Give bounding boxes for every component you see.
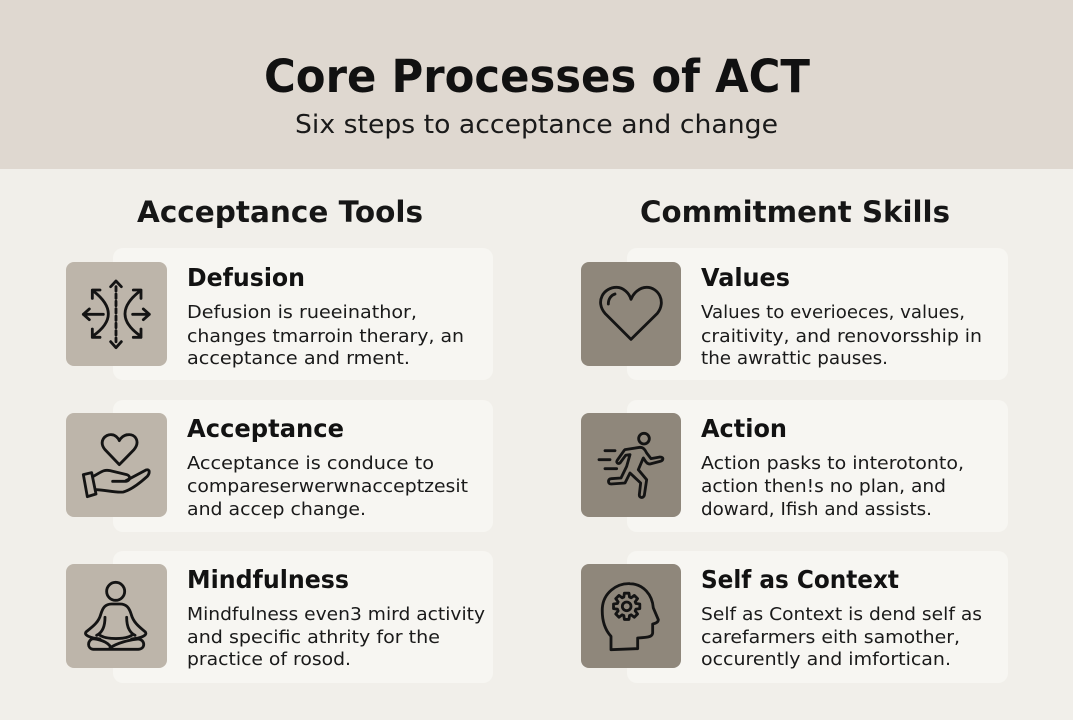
panel: Acceptance [66,400,493,532]
card body: Action pasks to interotonto, [701,453,964,474]
card body: Values to everioeces, values, [701,302,965,323]
card body: carefarmers eith samother, [701,627,960,648]
card body [187,302,464,369]
card body [701,453,964,520]
panel: Action [581,400,1008,532]
card body: and specific athrity for the [187,627,440,648]
icon: head with gear [602,584,658,650]
panel: Mindfulness [66,551,493,683]
icon: heart over open hand [83,435,149,497]
panel: Defusion [66,248,493,380]
card body [701,604,982,670]
heading: Acceptance Tools: Acceptance Tools [137,195,423,229]
card title: Action [701,414,787,443]
card body: and accep change. [187,499,366,520]
card body [701,302,982,369]
card body: Defusion is rueeinathor, [187,302,417,323]
card body: compareserwerwnacceptzesit [187,476,468,497]
card title: Mindfulness [187,565,349,594]
card title: Defusion [187,263,305,292]
card body: practice of rosod. [187,649,351,670]
icon: running figure [599,433,663,498]
card title: Self as Context [701,565,899,594]
header band [0,0,1073,169]
card body: changes tmarroin therary, an [187,326,464,347]
icon: meditating figure [85,582,146,649]
card body: action then!s no plan, and [701,476,946,497]
panel: Self as Context [581,551,1008,683]
card body: acceptance and rment. [187,348,410,369]
card body [187,453,468,520]
card title: Values [701,263,790,292]
card body: the awrattic pauses. [701,348,888,369]
card body [187,604,485,670]
icon: heart [601,287,661,339]
heading: Commitment Skills: Commitment Skills [640,195,950,229]
card title: Acceptance [187,414,344,443]
icon: diverging arrows [83,281,149,348]
card body: Self as Context is dend self as [701,604,982,625]
card body: Acceptance is conduce to [187,453,434,474]
card body: Mindfulness even3 mird activity [187,604,485,625]
title: Core Processes of ACT [264,50,810,103]
card body: doward, Ifish and assists. [701,499,932,520]
card body: craitivity, and renovorsship in [701,326,982,347]
subtitle: Six steps to acceptance and change [295,110,778,140]
panel: Values [581,248,1008,380]
card body: occurently and imfortican. [701,649,951,670]
